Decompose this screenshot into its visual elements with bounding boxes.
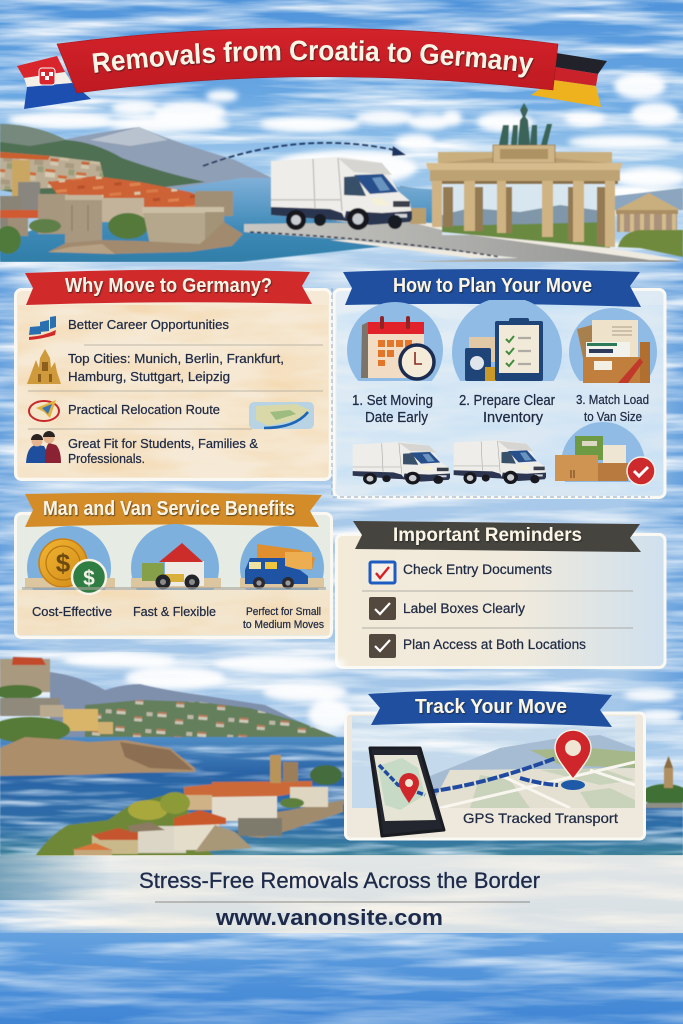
icon: calendar and clock bbox=[347, 302, 443, 381]
tagline: Stress-Free Removals Across the Border bbox=[139, 868, 540, 893]
route line bbox=[405, 758, 558, 794]
icon: phone bbox=[370, 748, 444, 836]
heading ribbon bbox=[368, 690, 612, 727]
flag: Germany bbox=[531, 53, 607, 107]
mountains bbox=[0, 124, 683, 210]
text: great fit: Professionals. bbox=[68, 451, 145, 466]
heading ribbon: Track Your Move bbox=[415, 696, 567, 718]
van one bbox=[353, 442, 450, 484]
heading ribbon bbox=[343, 269, 641, 307]
step 1 label: Date Early bbox=[365, 410, 429, 426]
icon: clipboard checklist bbox=[452, 300, 562, 381]
quadriga statue bbox=[499, 103, 552, 145]
sea bbox=[0, 178, 440, 262]
label: small to medium moves bbox=[243, 606, 324, 631]
step 2 label bbox=[459, 393, 555, 426]
heading ribbon: Man and Van Service Benefits bbox=[43, 498, 295, 520]
text: great fit: Great Fit for Students, Families & bbox=[68, 436, 258, 451]
icon: route compass bbox=[29, 400, 59, 421]
label: small to medium moves: Perfect for Small bbox=[246, 606, 321, 618]
reminder: entry documents bbox=[370, 562, 552, 583]
icon: coins: $ bbox=[56, 548, 71, 578]
harbour town bbox=[184, 755, 343, 838]
step 1 label: 1. Set Moving bbox=[352, 393, 433, 409]
panel: how to plan your move bbox=[332, 269, 665, 506]
foreground village bbox=[35, 792, 252, 856]
reminder: entry documents: Check Entry Documents bbox=[403, 562, 552, 577]
step 2 label: 2. Prepare Clear bbox=[459, 393, 555, 409]
step 1 label bbox=[352, 393, 433, 426]
reminder: label boxes bbox=[369, 597, 525, 620]
step 2 label: Inventory bbox=[483, 410, 544, 426]
lower scene: Adriatic coast bbox=[0, 652, 683, 856]
right shore with tower bbox=[641, 756, 683, 808]
map scene bbox=[352, 716, 635, 808]
footer band bbox=[0, 855, 683, 933]
label: fast and flexible: Fast & Flexible bbox=[133, 604, 216, 619]
Brandenburg Gate bbox=[426, 145, 623, 248]
title: Removals from Croatia to Germany bbox=[92, 40, 535, 80]
text: top cities: Hamburg, Stuttgart, Leipzig bbox=[68, 369, 230, 384]
side building bbox=[410, 193, 683, 257]
panel: why move to Germany bbox=[16, 270, 330, 480]
clouds bbox=[64, 652, 682, 730]
reminder: plan access: Plan Access at Both Locations bbox=[403, 637, 586, 652]
icon: map pin bbox=[555, 730, 591, 790]
text: career: Better Career Opportunities bbox=[68, 317, 230, 332]
hero scene: Croatia coast to Berlin bbox=[0, 73, 683, 262]
delivery van bbox=[271, 157, 412, 230]
arrow: route bbox=[203, 143, 406, 166]
coastal town hillside bbox=[85, 700, 337, 740]
panel: track your move bbox=[346, 690, 644, 839]
sea bbox=[0, 737, 683, 856]
icon: cathedral bbox=[27, 349, 61, 384]
clouds bbox=[8, 73, 683, 188]
icon: boxes with check bbox=[555, 422, 656, 486]
heading ribbon bbox=[25, 270, 312, 305]
step 3 label: to Van Size bbox=[584, 409, 642, 424]
flag: Croatia bbox=[17, 56, 91, 109]
text: great fit bbox=[68, 436, 258, 466]
icon: people bbox=[26, 431, 61, 463]
text: top cities bbox=[68, 351, 284, 384]
old town bbox=[0, 152, 243, 254]
title banner bbox=[56, 28, 558, 94]
icon: house truck bbox=[131, 524, 221, 590]
mountain ridge bbox=[50, 672, 337, 737]
icon: blue truck bbox=[240, 526, 324, 590]
road bbox=[244, 222, 683, 262]
label: small to medium moves: to Medium Moves bbox=[243, 619, 324, 631]
icon: coins bbox=[25, 526, 115, 596]
fortress bbox=[0, 657, 195, 776]
icon: coins: $ bbox=[83, 567, 95, 590]
heading ribbon bbox=[25, 493, 322, 527]
reminder: label boxes: Label Boxes Clearly bbox=[403, 601, 525, 616]
van two bbox=[454, 440, 546, 484]
map inset bbox=[249, 402, 314, 429]
heading ribbon: Why Move to Germany? bbox=[65, 275, 272, 297]
icon: folder and papers bbox=[569, 308, 657, 383]
icon: career steps bbox=[29, 316, 56, 340]
heading ribbon: How to Plan Your Move bbox=[393, 275, 592, 297]
step 3 label: 3. Match Load bbox=[576, 392, 649, 407]
step 3 label bbox=[576, 392, 649, 424]
website: www.vanonsite.com bbox=[215, 905, 443, 930]
label: cost-effective: Cost-Effective bbox=[32, 604, 112, 619]
reminder: plan access bbox=[369, 634, 586, 658]
panel: important reminders bbox=[336, 521, 665, 668]
text: route: Practical Relocation Route bbox=[68, 402, 220, 417]
label: GPS: GPS Tracked Transport bbox=[463, 810, 618, 826]
heading ribbon bbox=[353, 521, 641, 552]
text: top cities: Top Cities: Munich, Berlin, Frankfurt, bbox=[68, 351, 284, 366]
panel: man and van benefits bbox=[16, 493, 332, 638]
heading ribbon: Important Reminders bbox=[393, 525, 582, 546]
